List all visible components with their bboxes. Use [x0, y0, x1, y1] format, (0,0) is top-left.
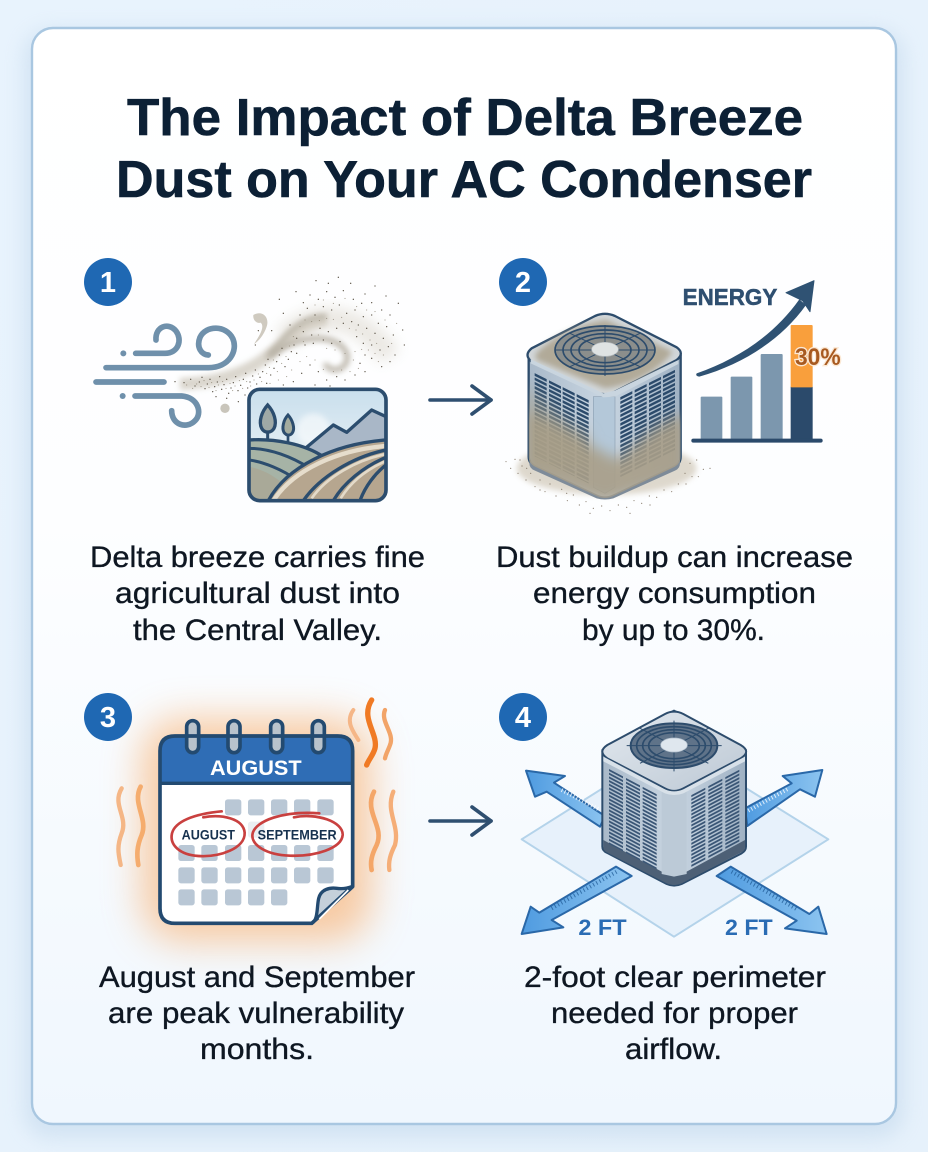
caption: step 1: Delta breeze carries fine [90, 541, 425, 574]
rings [187, 721, 324, 753]
calendar header [160, 736, 353, 783]
badge: number 2: 2 [515, 267, 531, 299]
badge: number 3: 3 [100, 702, 116, 734]
icon: AC unit with clearance [522, 711, 828, 940]
caption: step 4 [524, 961, 826, 1066]
badge: number 4 [499, 693, 547, 741]
panel: step 1 dust [84, 258, 425, 647]
badge: number 4: 4 [515, 702, 531, 734]
top face [602, 712, 746, 791]
caption: step 1: agricultural dust into [115, 577, 400, 610]
icon: dusty AC condenser [506, 314, 710, 513]
clearance floor [522, 743, 828, 937]
badge: number 1 [84, 258, 132, 306]
top face [527, 314, 681, 394]
badge: number 1: 1 [100, 267, 116, 299]
badge: number 3 [84, 693, 132, 741]
arrow: step 3 to 4 [430, 807, 491, 835]
arrow: upper right [745, 770, 822, 826]
caption: step 2 [496, 541, 853, 647]
labels: 2 FT [578, 915, 773, 940]
louvres [541, 373, 669, 480]
fan grille [555, 325, 655, 376]
calendar page [160, 736, 353, 923]
label: ENERGY: ENERGY [683, 284, 778, 310]
caption: step 3: are peak vulnerability [108, 997, 404, 1030]
caption: step 3 [99, 961, 415, 1066]
caption: step 1: the Central Valley. [133, 614, 382, 647]
circled months: AUGUST [182, 827, 236, 842]
heat glow [142, 718, 372, 942]
title: The Impact of Delta Breeze [127, 89, 803, 147]
caption: step 1 [90, 541, 425, 647]
month heading: AUGUST [210, 756, 302, 780]
date grid [178, 799, 334, 905]
caption: step 2: energy consumption [533, 577, 816, 610]
arrow: lower right [717, 867, 827, 934]
panel: step 4 clearance [499, 693, 828, 1066]
fan grille [627, 721, 722, 771]
label: 30%: 30% [795, 344, 841, 371]
caption: step 4: 2-foot clear perimeter [524, 961, 826, 994]
panel: step 2 energy [496, 258, 853, 647]
caption: step 2: by up to 30%. [582, 614, 765, 647]
caption: step 2: Dust buildup can increase [496, 541, 853, 574]
circled months: SEPTEMBER [258, 827, 337, 842]
icon: hot calendar [118, 700, 396, 942]
labels: 2 FT: 2 FT [725, 915, 773, 940]
circled months [172, 811, 343, 856]
panel: step 3 calendar [84, 693, 415, 1066]
louvres [616, 773, 732, 866]
calendar outline [160, 736, 353, 923]
caption: step 4: needed for proper [551, 997, 798, 1030]
icon: wind swirls [96, 326, 234, 425]
title: Dust on Your AC Condenser [116, 151, 812, 209]
badge: number 2 [499, 258, 547, 306]
caption: step 3: August and September [99, 961, 415, 994]
icon: farmland scene [249, 389, 386, 501]
bar chart: energy [683, 281, 841, 441]
page curl [312, 887, 352, 923]
arrow: step 1 to 2 [430, 386, 491, 414]
dust on ground [506, 442, 710, 513]
condenser body [529, 317, 681, 498]
caption: step 3: months. [200, 1033, 314, 1066]
title [116, 89, 812, 209]
labels: 2 FT: 2 FT [578, 915, 627, 940]
condenser body [602, 711, 746, 886]
arrow: lower left [522, 867, 632, 934]
arrow: rising energy [696, 299, 806, 377]
icon: wind and dust over farmland [96, 277, 404, 501]
arrow: upper left [526, 771, 605, 827]
dust buildup [528, 382, 681, 498]
heat waves [118, 700, 396, 870]
dust cloud [175, 277, 404, 413]
caption: step 4: airflow. [625, 1033, 722, 1066]
